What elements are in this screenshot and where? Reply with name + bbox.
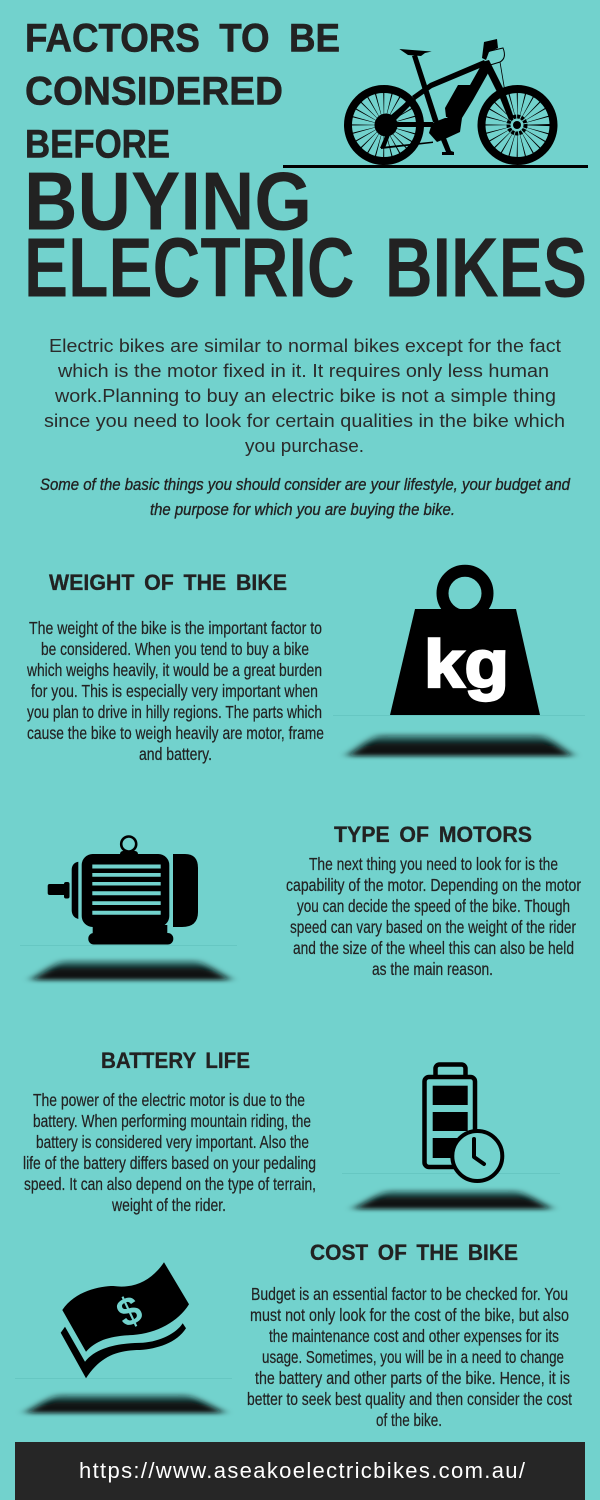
text: battery: The power of the electric motor is due to the — [33, 1090, 305, 1110]
text: weight — [26, 618, 324, 764]
intro paragraph — [44, 336, 565, 456]
icon: battery with clock — [342, 1064, 560, 1209]
icon: kg weight: kg — [424, 627, 509, 702]
text: weight: be considered. When you tend to buy a bike — [41, 639, 309, 659]
text: cost: of the bike. — [376, 1410, 442, 1430]
panel: cost of the bike — [15, 1240, 572, 1430]
italic note: the purpose for which you are buying the bike. — [150, 500, 455, 519]
title — [24, 16, 587, 314]
intro paragraph: which is the motor fixed in it. It requires only less human — [57, 361, 549, 381]
text: weight: which weighs heavily, it would be a great burden — [26, 660, 322, 680]
intro paragraph: Electric bikes are similar to normal bikes except for the fact — [49, 336, 561, 356]
panel: battery life — [23, 1048, 560, 1215]
text: motors: as the main reason. — [372, 959, 493, 979]
footer url: https://www.aseakoelectricbikes.com.au/ — [79, 1458, 526, 1483]
intro paragraph: you purchase. — [245, 436, 364, 456]
text: cost — [247, 1284, 572, 1430]
text: battery — [23, 1090, 316, 1215]
heading: cost: COST OF THE BIKE — [310, 1240, 518, 1265]
panel: type of motors — [20, 822, 581, 980]
icon: electric bike — [283, 39, 588, 168]
footer bar — [15, 1442, 585, 1500]
text: weight: cause the bike to weigh heavily are motor, frame — [27, 723, 324, 743]
text: battery: battery. When performing mountain riding, the — [33, 1111, 311, 1131]
text: weight: you plan to drive in hilly regions. The parts which — [27, 702, 322, 722]
text: battery: life of the battery differs based on your pedaling — [23, 1153, 316, 1173]
title: BEFORE — [25, 123, 170, 167]
text: weight: The weight of the bike is the important factor to — [29, 618, 322, 638]
icon: banknote — [15, 1262, 232, 1413]
icon: electric motor — [20, 836, 237, 980]
icon: kg weight — [333, 571, 585, 756]
text: weight: and battery. — [139, 744, 212, 764]
heading: battery: BATTERY LIFE — [101, 1048, 250, 1073]
title: FACTORS TO BE — [25, 16, 340, 60]
italic note — [40, 475, 570, 519]
text: battery: weight of the rider. — [111, 1195, 226, 1215]
text: weight: for you. This is especially very important when — [31, 681, 318, 701]
text: motors — [286, 854, 581, 979]
title: BUYING — [24, 154, 312, 247]
panel: weight of the bike — [26, 570, 585, 764]
text: battery: battery is considered very important. Also the — [36, 1132, 309, 1152]
title: CONSIDERED — [25, 70, 283, 114]
heading: motors: TYPE OF MOTORS — [334, 822, 532, 847]
intro paragraph: work.Planning to buy an electric bike is not a simple thing — [54, 386, 556, 406]
icon: banknote: $ — [110, 1287, 149, 1337]
heading: weight: WEIGHT OF THE BIKE — [49, 570, 287, 595]
text: battery: speed. It can also depend on the type of terrain, — [24, 1174, 316, 1194]
intro paragraph: since you need to look for certain qualities in the bike which — [44, 411, 565, 431]
